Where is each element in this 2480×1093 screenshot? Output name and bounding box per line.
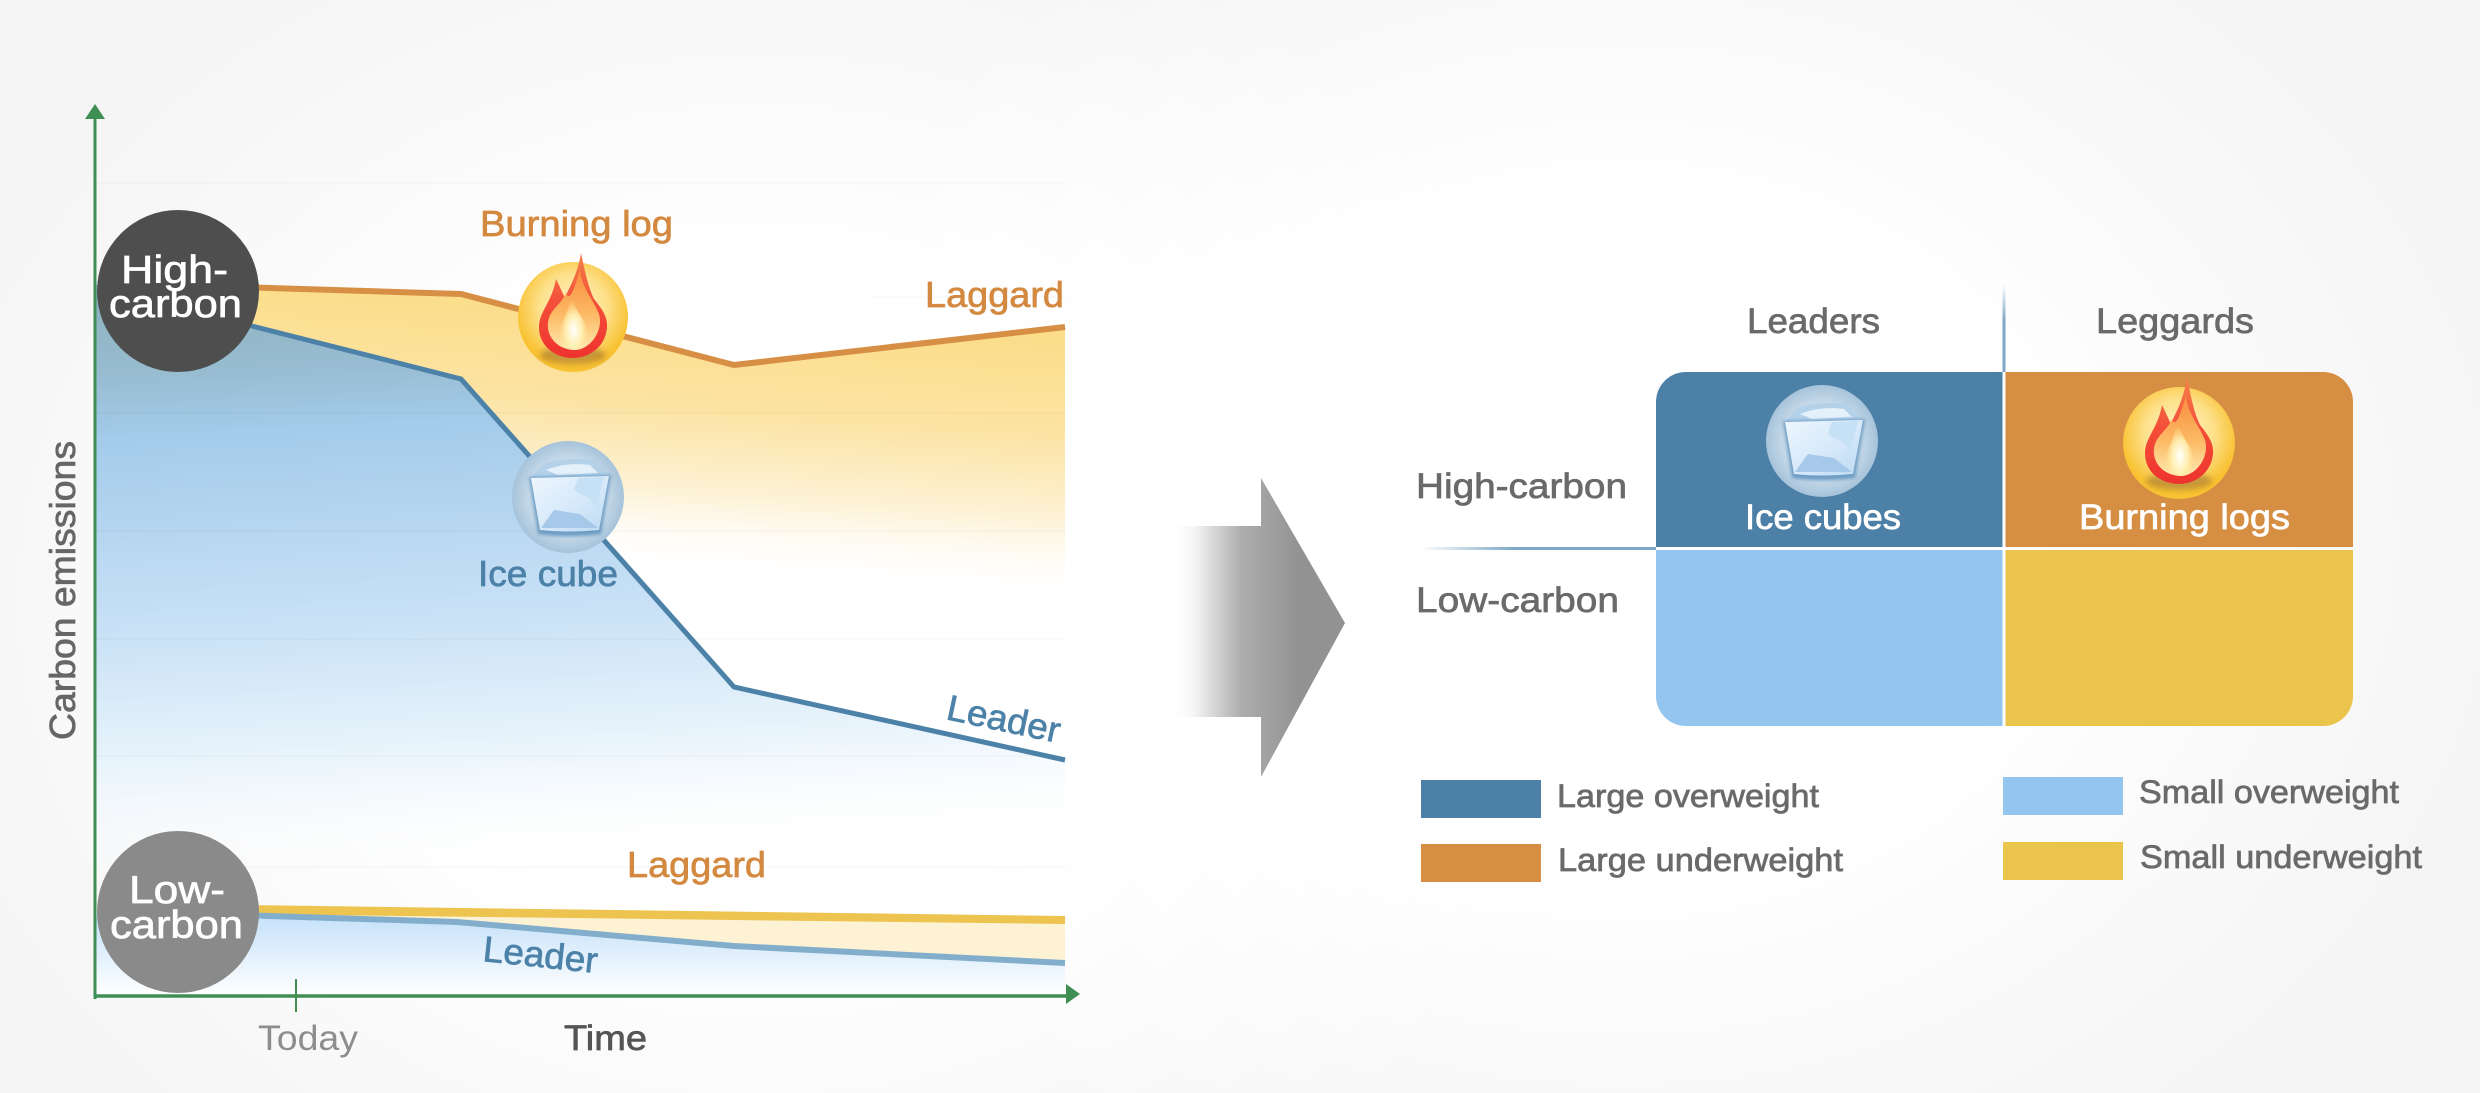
- icon: flame: [518, 253, 628, 372]
- badge: high-carbon: High-: [121, 249, 228, 292]
- cell: low-carbon laggards: [2006, 550, 2353, 726]
- cell: high-carbon laggards: [2006, 372, 2353, 547]
- legend: small overweight: Small overweight: [2139, 774, 2399, 810]
- axis label: carbon emissions: Carbon emissions: [42, 441, 83, 740]
- cell: high-carbon leaders: [1656, 372, 2002, 547]
- label: ice cube: Ice cube: [478, 553, 618, 594]
- area: low-carbon leader fill: [96, 916, 1065, 996]
- divider: horizontal: [1420, 547, 1656, 550]
- divider: vertical: [2002, 285, 2006, 372]
- column heading: leaders: Leaders: [1747, 302, 1880, 341]
- label: burning logs: Burning logs: [2079, 498, 2290, 537]
- label: laggard low: Laggard: [627, 844, 766, 885]
- label: leader low: Leader: [481, 928, 600, 981]
- badge: high-carbon: [97, 210, 259, 372]
- badge: low-carbon: [97, 831, 259, 993]
- badge: low-carbon: Low-: [129, 869, 225, 912]
- line: high-carbon laggard: [240, 287, 1065, 365]
- label: ice cubes: Ice cubes: [1745, 498, 1901, 537]
- legend: large overweight: Large overweight: [1557, 778, 1819, 814]
- label: laggard high: Laggard: [925, 274, 1064, 315]
- line: high-carbon leader: [240, 323, 1065, 760]
- line: low-carbon leader: [240, 915, 1065, 963]
- area: high-carbon laggard fill: [180, 288, 1065, 600]
- icon: ice cube: [512, 441, 624, 553]
- label: leader high: Leader: [943, 687, 1064, 751]
- y axis: [85, 104, 105, 999]
- area: low-carbon spread fill: [240, 912, 1065, 963]
- panel: matrix: [1416, 285, 2353, 726]
- column heading: leggards: Leggards: [2096, 302, 2254, 341]
- legend: large overweight: [1421, 778, 1819, 818]
- legend: small underweight: [2003, 839, 2422, 880]
- badge: low-carbon: carbon: [110, 904, 243, 947]
- axis label: time: Time: [564, 1019, 647, 1058]
- row heading: high-carbon: High-carbon: [1416, 467, 1627, 506]
- cell: low-carbon leaders: [1656, 550, 2002, 726]
- legend: [1421, 774, 2422, 882]
- label: burning log: Burning log: [480, 203, 673, 244]
- legend: small underweight: Small underweight: [2140, 839, 2422, 875]
- legend: small overweight: [2003, 774, 2399, 815]
- arrow: [1170, 478, 1345, 777]
- legend: large underweight: Large underweight: [1558, 842, 1843, 878]
- chart grid lines: [97, 183, 1065, 867]
- x axis: [94, 984, 1080, 1004]
- row heading: low-carbon: Low-carbon: [1416, 581, 1619, 620]
- legend: large underweight: [1421, 842, 1843, 882]
- line: low-carbon laggard: [240, 905, 1065, 924]
- icon: flame matrix: [2123, 377, 2235, 499]
- tick: today: [295, 979, 297, 1012]
- area: high-carbon leader fill: [96, 285, 1065, 880]
- axis label: today: Today: [258, 1019, 359, 1058]
- panel: emissions chart: [42, 104, 1080, 1058]
- badge: high-carbon: carbon: [109, 283, 242, 326]
- icon: ice cube matrix: [1766, 385, 1878, 497]
